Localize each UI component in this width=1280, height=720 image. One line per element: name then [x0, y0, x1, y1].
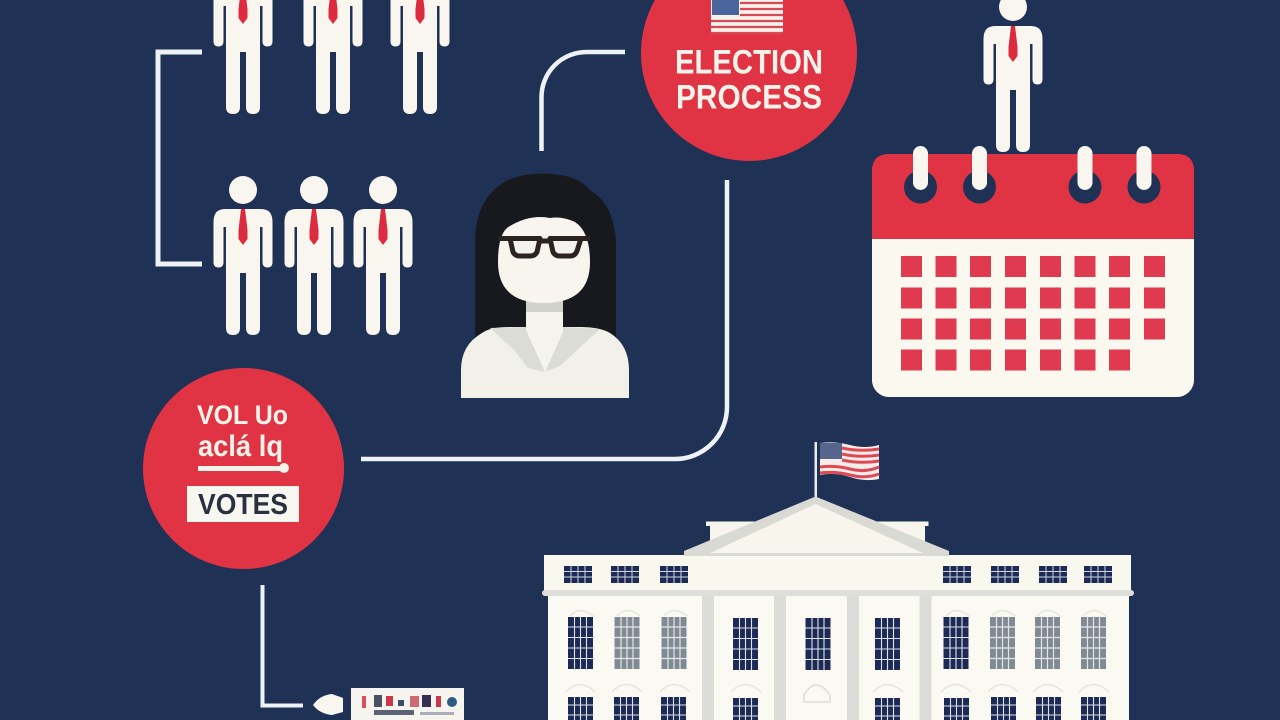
- icon: woman with glasses: [461, 173, 629, 398]
- neck front: [526, 312, 563, 372]
- icon: badge flag: [711, 0, 783, 34]
- lower storeys: [548, 595, 1129, 720]
- badge text line 1: VOL Uo: [197, 400, 288, 430]
- face: [498, 217, 590, 303]
- people group: bottom row: [214, 176, 412, 335]
- people group: top row: [214, 0, 450, 114]
- calendar body: [872, 154, 1194, 397]
- shirt collar shade: [490, 327, 600, 372]
- lower windows: [568, 697, 1106, 720]
- badge text line 2: aclá lq: [198, 430, 283, 463]
- connector: line from votes badge to election badge: [361, 180, 727, 459]
- cornice: [542, 590, 1134, 596]
- upper windows: [564, 566, 1112, 583]
- calendar header: [872, 154, 1194, 239]
- hair: [475, 173, 616, 340]
- heading: election process: ELECTION: [675, 44, 823, 82]
- connector: curve from woman to election badge: [542, 52, 625, 151]
- badge: votes: [143, 368, 344, 569]
- heading: election process: PROCESS: [676, 78, 822, 116]
- upper storey: [544, 555, 1131, 591]
- person standing on calendar: [984, 0, 1042, 152]
- icon: hand: [313, 694, 343, 715]
- badge: election process: [641, 0, 857, 161]
- pediment: [684, 496, 949, 556]
- ballot marks: [362, 695, 457, 715]
- main windows: [568, 617, 1106, 670]
- ballot card: [351, 688, 464, 720]
- neck: [526, 295, 563, 345]
- shirt: [461, 327, 629, 398]
- connector: line from votes badge to ballot: [262, 585, 303, 706]
- date squares: [901, 256, 1165, 370]
- arches: [566, 610, 1109, 702]
- binding rings: [913, 146, 1152, 190]
- columns: [702, 596, 932, 720]
- binding holes: [904, 170, 1160, 204]
- connector: bracket linking the two groups of people: [158, 52, 202, 264]
- glasses: [510, 238, 581, 256]
- flag pole: [814, 442, 817, 497]
- attic: [706, 522, 928, 556]
- building: white house: [542, 442, 1134, 720]
- arrow line: [198, 463, 289, 473]
- votes label: VOTES: [198, 489, 288, 521]
- calendar: [872, 146, 1194, 397]
- flag: [820, 442, 879, 480]
